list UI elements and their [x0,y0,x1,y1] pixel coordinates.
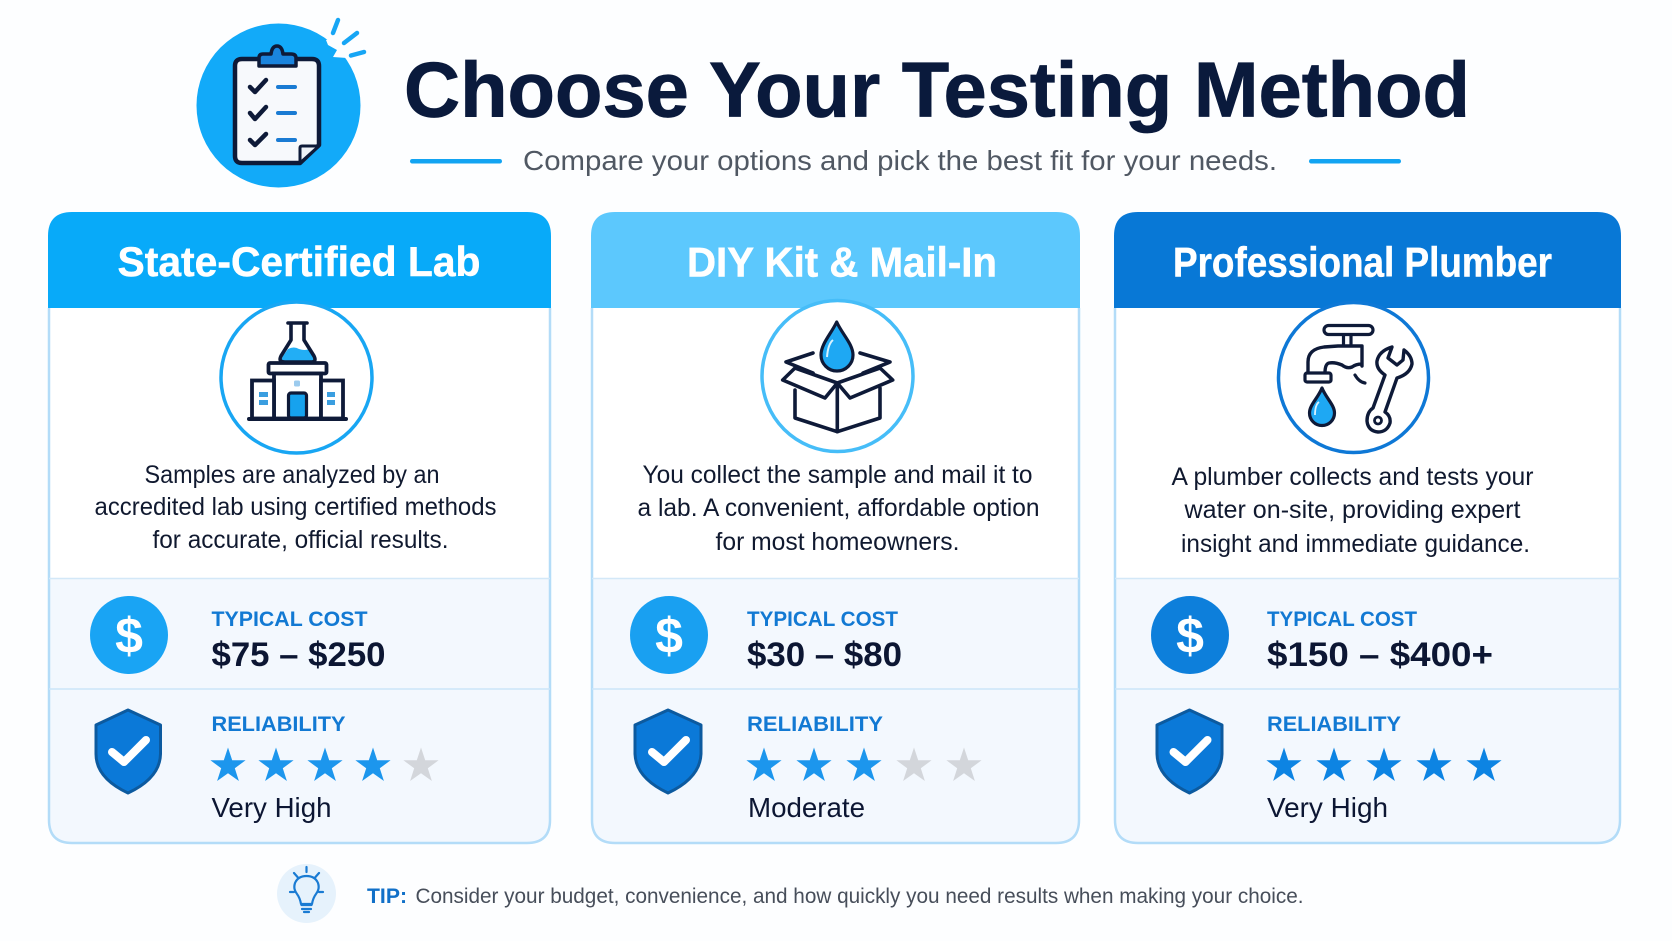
reliability: Moderate [748,792,865,823]
description [94,461,496,554]
description: a lab. A convenient, affordable option [638,494,1040,522]
icon: dollar coin: $ [655,608,683,664]
icon: laboratory building with flask [221,302,372,453]
icon: shield check [96,710,160,793]
typical cost: TYPICAL COST [747,608,898,631]
description: You collect the sample and mail it to [642,461,1032,489]
description: A plumber collects and tests your [1172,463,1534,491]
typical cost [212,608,386,674]
icon: light bulb [277,864,336,923]
reliability [746,713,982,823]
star rating: 3 of 5 [746,748,982,781]
typical cost: TYPICAL COST [212,608,368,631]
reliability: RELIABILITY [747,713,883,736]
description: insight and immediate guidance. [1181,530,1530,558]
typical cost: $30 – $80 [747,636,902,674]
panel: Professional Plumber [1114,212,1621,843]
description: accredited lab using certified methods [94,493,496,521]
panel: DIY Kit & Mail-In [591,212,1080,843]
cost and reliability background [49,578,550,843]
star rating: 5 of 5 [1266,748,1502,781]
icon: shield check [1157,710,1222,793]
typical cost [1267,608,1493,674]
subtitle: Compare your options and pick the best fit for your needs. [523,145,1277,176]
title: Choose Your Testing Method [404,46,1470,134]
description [638,461,1040,556]
icon: dollar coin [630,596,708,674]
icon: dollar coin [90,596,168,674]
description [1172,463,1534,558]
heading: DIY Kit & Mail-In [687,238,997,286]
panel: State-Certified Lab [48,212,551,843]
typical cost: $75 – $250 [212,636,386,674]
icon: faucet and wrench [1278,302,1428,452]
typical cost: TYPICAL COST [1267,608,1417,631]
description: Samples are analyzed by an [144,461,440,489]
description: water on-site, providing expert [1183,496,1521,524]
icon: clipboard checklist [196,20,364,188]
reliability: RELIABILITY [1267,713,1401,736]
header bar [591,212,1080,308]
description: for accurate, official results. [152,526,448,554]
tip text: TIP: [367,885,407,908]
icon: dollar coin: $ [1176,608,1204,664]
reliability [1266,713,1502,823]
description: for most homeowners. [716,528,960,556]
heading: State-Certified Lab [118,238,480,285]
tip text: Consider your budget, convenience, and how quickly you need results when making your choice. [416,885,1304,908]
header bar [1114,212,1621,308]
cost and reliability background [1115,578,1620,843]
cost and reliability background [592,578,1079,843]
reliability: Very High [212,792,332,823]
reliability [210,713,439,823]
icon: dollar coin: $ [115,608,143,664]
icon: box with water drop [762,300,913,452]
star rating: 4 of 5 [210,748,439,781]
typical cost [747,608,902,674]
icon: dollar coin [1151,596,1229,674]
reliability: RELIABILITY [212,713,346,736]
typical cost: $150 – $400+ [1267,636,1493,674]
reliability: Very High [1267,792,1388,823]
header bar [48,212,551,308]
icon: shield check [635,710,701,793]
heading: Professional Plumber [1173,238,1552,286]
